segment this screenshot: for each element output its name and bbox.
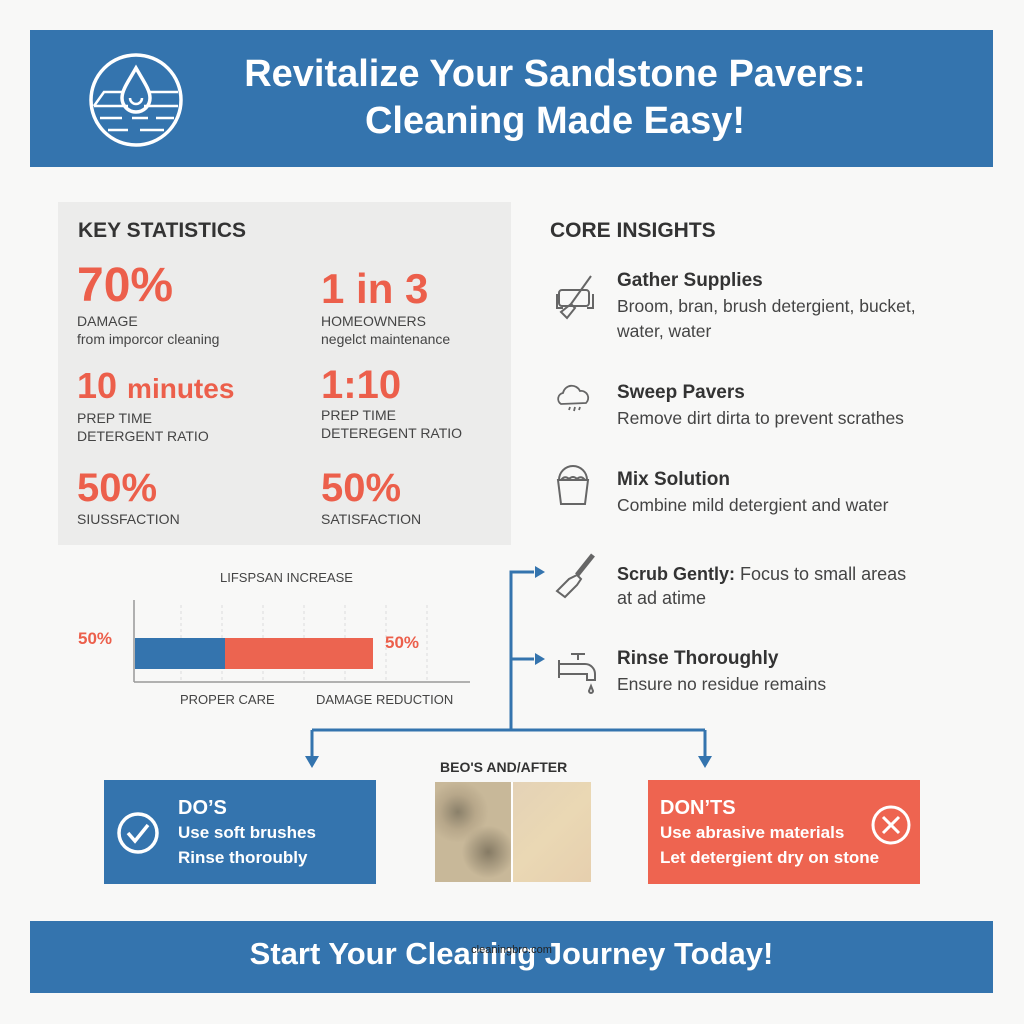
footer banner: Start Your Cleaning Journey Today! bbox=[250, 936, 773, 971]
stat: 70% bbox=[77, 259, 219, 347]
panel: do's: Rinse thoroubly bbox=[178, 848, 307, 867]
stat: 10 minutes: PREP TIME bbox=[77, 410, 152, 426]
title bbox=[244, 53, 866, 142]
insight: scrub gently bbox=[556, 554, 906, 608]
icon: check circle bbox=[117, 812, 159, 854]
chart: lifespan increase: DAMAGE REDUCTION bbox=[316, 692, 453, 707]
stat: 1 in 3 bbox=[321, 265, 450, 347]
panel: don'ts bbox=[648, 780, 920, 884]
insight: scrub gently: Scrub Gently: Focus to small areas bbox=[617, 564, 906, 584]
heading: core insights: CORE INSIGHTS bbox=[550, 219, 716, 242]
stat: 1:10: 1:10 bbox=[321, 363, 401, 407]
insight: rinse thoroughly: Rinse Thoroughly bbox=[617, 648, 778, 669]
stat: 70%: 70% bbox=[77, 259, 173, 312]
chart title: LIFSPSAN INCREASE bbox=[220, 570, 353, 585]
insight: mix solution: Mix Solution bbox=[617, 469, 730, 490]
before/after label: BEO'S AND/AFTER bbox=[440, 759, 567, 775]
panel: do's bbox=[104, 780, 376, 884]
insight: gather supplies bbox=[556, 270, 916, 341]
panel: key statistics bbox=[58, 202, 511, 545]
stat: 50% satisfaction left: 50% bbox=[77, 466, 157, 510]
panel: do's: DO’S bbox=[178, 797, 227, 819]
stat: 1 in 3: negelct maintenance bbox=[321, 331, 450, 347]
insight: sweep pavers bbox=[557, 382, 904, 428]
header banner bbox=[30, 30, 993, 167]
panel: do's: Use soft brushes bbox=[178, 823, 316, 842]
insight: mix solution: Combine mild detergient and water bbox=[617, 495, 888, 515]
insight: mix solution bbox=[556, 465, 888, 515]
stat: 1:10 bbox=[321, 363, 462, 441]
title: Revitalize Your Sandstone Pavers: bbox=[244, 53, 866, 95]
stat: 10 minutes: DETERGENT RATIO bbox=[77, 428, 209, 444]
stat: 1 in 3: HOMEOWNERS bbox=[321, 313, 426, 329]
stat: 70%: DAMAGE bbox=[77, 313, 138, 329]
insight: sweep pavers: Remove dirt dirta to prevent scrathes bbox=[617, 408, 904, 428]
panel: don'ts: Let detergient dry on stone bbox=[660, 848, 879, 867]
insight: gather supplies: Broom, bran, brush detergient, bucket, bbox=[617, 296, 916, 316]
icon: cloud bbox=[557, 384, 590, 412]
icon: broom bbox=[556, 275, 594, 320]
panel: don'ts: Use abrasive materials bbox=[660, 823, 844, 842]
insight: rinse thoroughly bbox=[558, 648, 826, 694]
title: Cleaning Made Easy! bbox=[365, 100, 745, 142]
icon: water drop on paver bbox=[89, 53, 183, 147]
icon: bucket bbox=[556, 465, 590, 505]
stat: 1:10: DETEREGENT RATIO bbox=[321, 425, 462, 441]
stat: 1 in 3: 1 in 3 bbox=[321, 265, 428, 312]
stat: 1:10: PREP TIME bbox=[321, 407, 396, 423]
insight: scrub gently: at ad atime bbox=[617, 588, 706, 608]
icon: faucet bbox=[558, 653, 596, 694]
insight: gather supplies: water, water bbox=[617, 321, 711, 341]
footer banner bbox=[30, 921, 993, 993]
stat: 70%: from imporcor cleaning bbox=[77, 331, 219, 347]
stat: 50% satisfaction left: SIUSSFACTION bbox=[77, 511, 180, 527]
stat: 10 minutes bbox=[77, 365, 234, 444]
bar labels: 50% bbox=[78, 629, 112, 648]
before/after photo bbox=[435, 782, 591, 882]
insight: sweep pavers: Sweep Pavers bbox=[617, 382, 745, 403]
insight: gather supplies: Gather Supplies bbox=[617, 270, 763, 291]
icon: brush bbox=[556, 554, 595, 598]
chart: lifespan increase: PROPER CARE bbox=[180, 692, 275, 707]
icon: x circle bbox=[872, 806, 910, 844]
stat: 10 minutes: 10 minutes bbox=[77, 365, 234, 406]
stat: 50% satisfaction right: 50% bbox=[321, 466, 401, 510]
chart: lifespan increase: 50% bbox=[385, 633, 419, 652]
panel: don'ts: DON’TS bbox=[660, 797, 736, 819]
heading: key statistics: KEY STATISTICS bbox=[78, 219, 246, 242]
stat: 50% satisfaction right bbox=[321, 466, 421, 527]
footer banner: cleaningbro.com bbox=[471, 944, 552, 956]
stat: 50% satisfaction right: SATISFACTION bbox=[321, 511, 421, 527]
chart: lifespan increase bbox=[78, 570, 470, 707]
stat: 50% satisfaction left bbox=[77, 466, 180, 527]
insight: rinse thoroughly: Ensure no residue remains bbox=[617, 674, 826, 694]
